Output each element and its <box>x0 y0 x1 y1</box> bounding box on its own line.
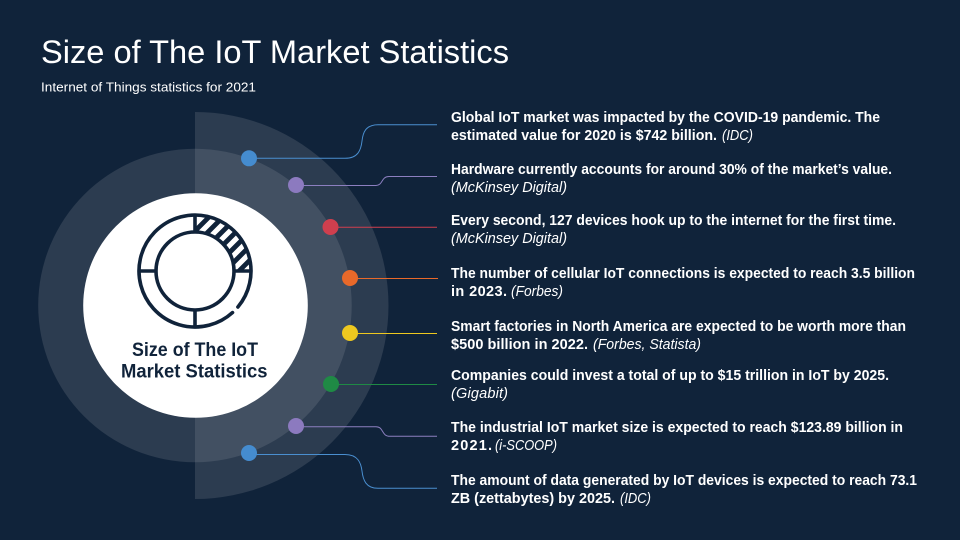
stat 1 text: (IDC) <box>722 128 753 144</box>
title: Size of The IoT Market Statistics <box>41 34 509 70</box>
stat 4 text: (Forbes) <box>511 284 563 300</box>
middle circle <box>38 149 352 462</box>
stat 8 text: (IDC) <box>620 491 651 507</box>
connector 1: blue <box>241 125 437 166</box>
connector 8: blue <box>241 445 437 488</box>
stat 7 text: (i-SCOOP) <box>495 438 557 454</box>
stat 5 text <box>451 319 906 353</box>
stat 7 text: The industrial IoT market size is expected to reach $123.89 billion in <box>451 420 903 436</box>
middle circle right half overlap <box>195 149 352 462</box>
stat 2 text: Hardware currently accounts for around 30% of the market’s value. <box>451 162 892 178</box>
center label: Size of The IoT <box>132 340 258 361</box>
stat 2 text: (McKinsey Digital) <box>451 180 567 196</box>
stat 8 text: The amount of data generated by IoT devices is expected to reach 73.1 <box>451 473 917 489</box>
stat 2 text <box>451 162 892 196</box>
connector 2: purple <box>288 176 437 193</box>
stat 6 text: (Gigabit) <box>451 386 508 402</box>
stat 6 text: Companies could invest a total of up to $15 trillion in IoT by 2025. <box>451 368 889 384</box>
stat 7 text <box>451 420 903 454</box>
stat 1 text <box>451 110 880 144</box>
stat 4 text: in 2023. <box>451 284 507 300</box>
connector 7: purple <box>288 418 437 436</box>
stat 7 text: 2021. <box>451 438 492 454</box>
stat 4 text: The number of cellular IoT connections is expected to reach 3.5 billion <box>451 266 915 282</box>
stat 8 text <box>451 473 917 507</box>
stat 8 text: ZB (zettabytes) by 2025. <box>451 491 615 507</box>
connector 6: green <box>323 376 437 392</box>
stat 5 text: (Forbes, Statista) <box>593 337 701 353</box>
stat 3 text: (McKinsey Digital) <box>451 231 567 247</box>
icon: donut chart <box>137 213 253 329</box>
connector 5: yellow <box>342 325 437 341</box>
stat 1 text: estimated value for 2020 is $742 billion. <box>451 128 717 144</box>
stat 5 text: $500 billion in 2022. <box>451 337 588 353</box>
center white circle <box>83 193 308 418</box>
center label: Market Statistics <box>121 362 268 382</box>
subtitle: Internet of Things statistics for 2021 <box>41 80 256 94</box>
stat 1 text: Global IoT market was impacted by the COVID-19 pandemic. The <box>451 110 880 126</box>
connector 4: orange <box>342 270 438 286</box>
stat 3 text: Every second, 127 devices hook up to the internet for the first time. <box>451 213 896 229</box>
stat 6 text <box>451 368 889 402</box>
stat 5 text: Smart factories in North America are expected to be worth more than <box>451 319 906 335</box>
connector 3: red <box>322 219 437 235</box>
concentric circle diagram <box>38 112 388 499</box>
stat 4 text <box>451 266 915 300</box>
center label <box>121 340 268 382</box>
stat 3 text <box>451 213 896 247</box>
outer half circle <box>195 112 388 499</box>
